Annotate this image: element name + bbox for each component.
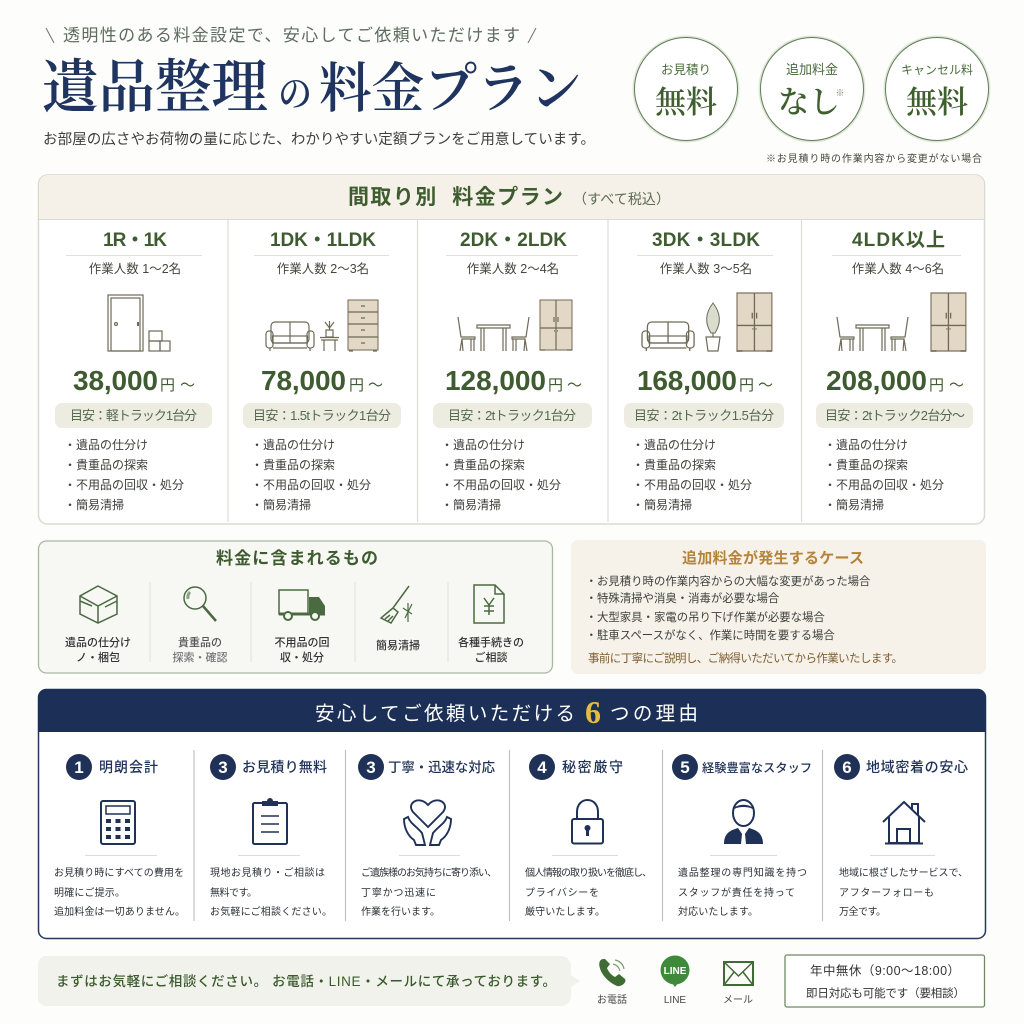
item: paperwork [458,585,524,664]
plan: 4LDK以上: 208,000 [826,365,927,396]
reason 6: 万全です。 [839,905,886,918]
plan: 2DK・2LDK: 2DK・2LDK [460,230,567,251]
list of cases: ・大型家具・家電の吊り下げ作業が必要な場合 [586,610,825,624]
item: sorting: 遺品の仕分け [65,635,131,649]
business hours box: 即日対応も可能です（要相談） [806,986,965,1000]
reason 5: スタッフが責任を持って [678,886,795,899]
icon: LINE [660,956,690,1006]
badge: free cancellation [884,36,990,142]
plan: 3DK・3LDK [624,230,784,512]
plan: 1DK・1LDK: ・不用品の回収・処分 [251,478,371,492]
plan: 3DK・3LDK: 168,000 [637,365,737,396]
plan: 1DK・1LDK: 作業人数 2～3名 [277,261,369,276]
plan: 2DK・2LDK: 目安：2tトラック1台分 [448,408,576,423]
badge: free estimate: 無料 [655,85,717,120]
plan: 4LDK以上: 作業人数 4～6名 [852,261,944,276]
icon: house [883,802,925,844]
item: sorting [65,586,131,664]
plan: 1R・1K: ・簡易清掃 [64,497,124,512]
plan: 1R・1K: ・不用品の回収・処分 [64,478,184,492]
plan: 3DK・3LDK: ・遺品の仕分け [632,437,716,452]
plan: 1DK・1LDK: 目安：1.5tトラック1台分 [253,408,391,423]
reason 5: 経験豊富なスタッフ [702,760,812,775]
reason 1: お見積り時にすべての費用を [54,866,184,879]
table header: 間取り別 料金プラン [348,186,563,209]
icon: sofa, plant and tall cabinet [642,293,772,351]
heading: 料金に含まれるもの [216,548,378,568]
plan: 3DK・3LDK: ・不用品の回収・処分 [632,478,752,492]
badge: free estimate [634,36,738,142]
list of cases: ・特殊清掃や消臭・消毒が必要な場合 [586,591,780,605]
list of cases: ・駐車スペースがなく、作業に時間を要する場合 [586,628,835,642]
badge: no extra fee: なし [778,85,840,120]
plan: 4LDK以上: 円～ [929,377,964,394]
note: 事前に丁寧にご説明し、ご納得いただいてから作業いたします。 [588,651,903,665]
reason 2: 無料です。 [210,886,257,899]
plan: 1R・1K: ・遺品の仕分け [64,437,148,452]
plan: 1R・1K [55,230,212,512]
plan: 2DK・2LDK: ・簡易清掃 [441,497,501,512]
reason 3 [358,754,497,918]
banner: つの理由 [610,703,698,725]
badge: free estimate: お見積り [661,62,711,77]
plan: 1R・1K: 目安：軽トラック1台分 [70,408,197,423]
icon: heart in hands [404,800,451,845]
reason 1: 明確にご提示。 [54,886,125,899]
icon: mail: メール [723,995,753,1006]
item: cleaning broom: 簡易清掃 [376,638,420,652]
speech bar: まずはお気軽にご相談ください。 お電話・LINE・メールにて承っております。 [56,973,556,989]
item: search [172,587,228,664]
icon: LINE: LINE [664,966,687,977]
table header [39,175,984,220]
speech bar [38,956,580,1006]
plan: 1DK・1LDK: 78,000 [261,365,346,396]
reason 6: 地域密着の安心 [866,759,968,775]
reason 3: 丁寧かつ迅速に [361,886,436,899]
plan: 2DK・2LDK: ・不用品の回収・処分 [441,478,561,492]
reason 5: 対応いたします。 [678,905,758,918]
tagline: 透明性のある料金設定で、安心してご依頼いただけます [63,26,520,45]
business hours box: 年中無休（9:00～18:00） [810,963,960,978]
plan: 3DK・3LDK: 作業人数 3～5名 [660,261,752,276]
reason 1: 追加料金は一切ありません。 [54,905,185,918]
item: disposal truck: 収・処分 [280,650,324,664]
plan: 3DK・3LDK: 円～ [739,377,773,394]
reason 3: 作業を行います。 [361,905,440,918]
panel: included in price [38,541,552,673]
plan: 2DK・2LDK: ・遺品の仕分け [441,437,525,452]
plan: 1R・1K: 円～ [160,377,195,394]
plan: 1R・1K: 作業人数 1～2名 [89,261,181,276]
plan: 4LDK以上: ・遺品の仕分け [824,437,908,452]
plan: 2DK・2LDK: 128,000 [445,365,546,396]
item: disposal truck [274,590,330,664]
plan: 1DK・1LDK [243,230,401,512]
reason 4: 秘密厳守 [562,759,623,775]
banner: 6 [585,694,601,730]
icon: phone [597,959,627,1006]
icon: mail [723,962,753,1006]
footnote: ※お見積り時の作業内容から変更がない場合 [766,152,982,165]
plan: 1DK・1LDK: ・遺品の仕分け [251,437,335,452]
icon: door and boxes [108,295,170,351]
reason 3: 丁寧・迅速な対応 [388,760,496,775]
reason 5 [672,754,812,918]
panel: extra fee cases [571,540,986,674]
icon: staff person [724,800,763,844]
reason 2: お見積り無料 [242,759,327,775]
title: の [278,74,312,116]
reason 4: プライバシーを [525,887,599,899]
plan: 1DK・1LDK: ・貴重品の探索 [251,458,335,472]
badge: no extra fee [760,36,864,142]
reason 2: 現地お見積り・ご相談は [210,866,325,879]
heading: 追加料金が発生するケース [682,549,864,567]
reason 6 [834,754,968,918]
icon: clipboard [253,798,287,844]
plan: 3DK・3LDK: ・簡易清掃 [632,497,692,512]
item: paperwork: 各種手続きの [458,635,524,649]
plan: 4LDK以上 [816,229,973,512]
icon: phone: お電話 [597,994,627,1006]
item: cleaning broom [376,586,420,652]
contact footer [38,955,984,1007]
item: search: 探索・確認 [172,650,228,664]
plan: 4LDK以上: ・不用品の回収・処分 [824,478,944,492]
icon: sofa, side table and chest [266,300,378,351]
panel: six reasons [38,689,986,938]
reason 5: 5 [680,758,690,777]
list of cases: ・お見積り時の作業内容からの大幅な変更があった場合 [586,574,871,588]
plan: 2DK・2LDK: ・貴重品の探索 [441,458,525,472]
business hours box [785,955,984,1007]
icon: calculator [101,801,135,844]
reason 2: 3 [218,758,228,777]
title [42,55,582,120]
plan: 3DK・3LDK: ・貴重品の探索 [632,458,716,472]
icon: dining set and tall cabinet [837,293,966,351]
table header: （すべて税込） [573,191,670,207]
reason 1: 1 [74,758,84,777]
plan: 1R・1K: 1R・1K [103,230,167,251]
title: 遺品整理 [42,55,268,120]
plan: 3DK・3LDK: 3DK・3LDK [652,230,760,251]
badge: free cancellation: キャンセル料 [901,63,973,77]
plan: 2DK・2LDK [433,230,592,512]
plan: 1DK・1LDK: 1DK・1LDK [270,230,376,251]
reason 3: ご遺族様のお気持ちに寄り添い、 [361,866,497,879]
subtitle: お部屋の広さやお荷物の量に応じた、わかりやすい定額プランをご用意しています。 [43,131,595,148]
reason 6: 6 [842,758,852,777]
icon: dining set and cabinet [458,300,572,351]
reason 1 [54,754,185,918]
badge: no extra fee: 追加料金 [786,62,838,77]
badge: free cancellation: 無料 [906,85,968,120]
plan: 2DK・2LDK: 円～ [548,377,582,394]
icon: padlock [572,800,603,844]
badge: no extra fee: ※ [835,88,845,98]
reason 2 [210,754,332,918]
reason 2: お気軽にご相談ください。 [210,905,332,918]
plan: 3DK・3LDK: 目安：2tトラック1.5台分 [634,408,774,423]
list of cases [586,574,871,642]
plan: 4LDK以上: 目安：2tトラック2台分～ [825,408,965,423]
plan: 4LDK以上: ・貴重品の探索 [824,458,908,472]
header [42,26,990,165]
reason 4: 個人情報の取り扱いを徹底し、 [525,866,652,879]
title: 料金プラン [319,59,582,119]
plan: 2DK・2LDK: 作業人数 2～4名 [467,261,559,276]
plan: 1DK・1LDK: ・簡易清掃 [251,497,311,512]
reason 4: 4 [537,758,547,777]
reason 4 [525,754,652,918]
reason 6: アフターフォローも [839,887,934,899]
banner: 安心してご依頼いただける [315,703,575,725]
banner [38,689,986,732]
plan: 4LDK以上: 4LDK以上 [852,229,945,251]
reason 3: 3 [366,758,376,777]
plan: 1R・1K: ・貴重品の探索 [64,458,148,472]
reason 5: 遺品整理の専門知識を持つ [678,866,807,879]
reason 1: 明朗会計 [99,759,158,775]
item: sorting: ノ・梱包 [76,650,120,664]
item: paperwork: ご相談 [474,650,508,664]
reason 4: 厳守いたします。 [525,905,605,918]
item: search: 貴重品の [178,635,222,649]
panel: pricing table [38,175,984,524]
item: disposal truck: 不用品の回 [274,636,330,649]
plan: 1R・1K: 38,000 [73,365,158,396]
plan: 1DK・1LDK: 円～ [349,377,383,394]
reason 6: 地域に根ざしたサービスで、 [839,866,968,879]
icon: LINE: LINE [664,995,686,1006]
plan: 4LDK以上: ・簡易清掃 [824,497,884,512]
